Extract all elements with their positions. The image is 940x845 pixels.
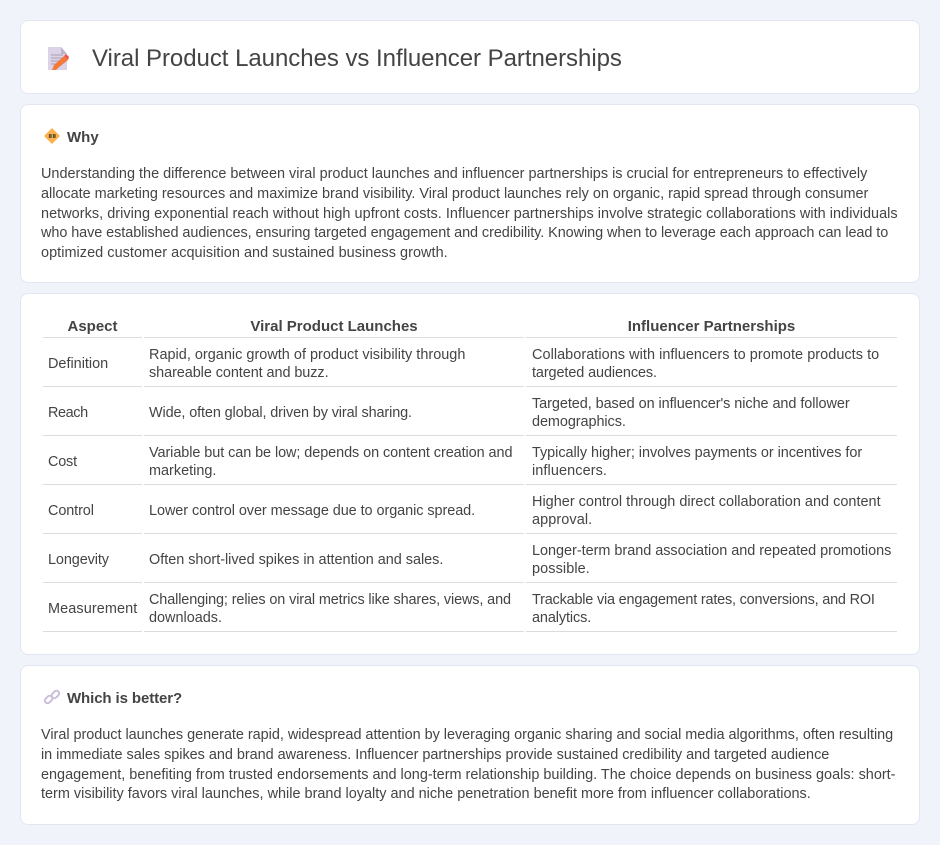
- row: control: Lower control over message due to organic spread.: [149, 503, 475, 519]
- table header row: [43, 318, 897, 338]
- text block: why paragraph: allocate marketing resources and maximize brand visibility. Viral product launches rely on organic, rapid spread through consumer: [41, 186, 868, 202]
- panel: comparison table: [20, 293, 920, 655]
- text block: why paragraph: [41, 166, 898, 261]
- row: control: Higher control through direct collaboration and content: [532, 494, 881, 510]
- row: measurement: analytics.: [532, 610, 591, 626]
- row: reach: Reach: [48, 405, 88, 421]
- text block: why paragraph: Understanding the difference between viral product launches and influencer partnerships is crucial for entrepreneurs to effectively: [41, 166, 867, 182]
- row: cost: Cost: [48, 454, 77, 470]
- row: cost: influencers.: [532, 463, 607, 479]
- row: reach: Wide, often global, driven by viral sharing.: [149, 405, 412, 421]
- row: measurement: downloads.: [149, 610, 222, 626]
- heading: which is better: Which is better?: [67, 690, 182, 707]
- row: cost: Typically higher; involves payments or incentives for: [532, 445, 862, 461]
- column header: viral product launches: Viral Product Launches: [250, 318, 418, 335]
- text block: why paragraph: who have established audiences, ensuring targeted engagement and credibility. Knowing when to leverage each approach can lead to: [41, 225, 888, 241]
- row: control: [43, 494, 897, 534]
- row: cost: [43, 445, 897, 485]
- row: cost: marketing.: [149, 463, 216, 479]
- text block: why paragraph: optimized customer acquisition and sustained business growth.: [41, 245, 448, 261]
- heading: why: Why: [67, 129, 99, 146]
- row: reach: Targeted, based on influencer's niche and follower: [532, 396, 850, 412]
- icon: link: [44, 690, 60, 704]
- row: definition: Rapid, organic growth of product visibility through: [149, 347, 465, 363]
- text block: why paragraph: networks, driving exponential reach without high upfront costs. Influencer partnerships involve strategic collaborations with individuals: [41, 206, 898, 222]
- text block: which is better paragraph: engagement, benefiting from trusted endorsements and long-term relationship building. The choice depends on business goals: short-: [41, 767, 895, 783]
- text block: which is better paragraph: term visibility favors viral launches, while brand loyalty and niche penetration benefit more from influencer collaborations.: [41, 786, 811, 802]
- row: longevity: Longer-term brand association and repeated promotions: [532, 543, 891, 559]
- row: longevity: possible.: [532, 561, 590, 577]
- row: definition: targeted audiences.: [532, 365, 657, 381]
- row: longevity: Often short-lived spikes in attention and sales.: [149, 552, 443, 568]
- row: control: Control: [48, 503, 94, 519]
- column header: aspect: Aspect: [67, 318, 118, 335]
- row: reach: [43, 396, 897, 436]
- row: measurement: Measurement: [48, 601, 137, 617]
- icon: warning diamond: [44, 128, 60, 144]
- row: definition: Definition: [48, 356, 108, 372]
- row: control: approval.: [532, 512, 592, 528]
- row: definition: [43, 347, 897, 387]
- row: measurement: [43, 592, 897, 632]
- text block: which is better paragraph: [41, 727, 895, 802]
- row: cost: Variable but can be low; depends on content creation and: [149, 445, 512, 461]
- row: definition: shareable content and buzz.: [149, 365, 329, 381]
- title: Viral Product Launches vs Influencer Partnerships: [92, 45, 622, 72]
- row: longevity: [43, 543, 897, 583]
- row: measurement: Challenging; relies on viral metrics like shares, views, and: [149, 592, 511, 608]
- text block: which is better paragraph: Viral product launches generate rapid, widespread attention by leveraging organic sharing and social media algorithms, often resulting: [41, 727, 893, 743]
- panel: why: [20, 104, 920, 283]
- panel: title header: [20, 20, 920, 94]
- text block: which is better paragraph: in immediate sales spikes and brand awareness. Influencer partnerships provide sustained credibility and targeted audience: [41, 747, 829, 763]
- column header: influencer partnerships: Influencer Partnerships: [628, 318, 795, 335]
- row: longevity: Longevity: [48, 552, 109, 568]
- row: reach: demographics.: [532, 414, 626, 430]
- row: measurement: Trackable via engagement rates, conversions, and ROI: [532, 592, 875, 608]
- row: definition: Collaborations with influencers to promote products to: [532, 347, 879, 363]
- icon: document with pencil: [48, 47, 69, 70]
- panel: which is better: [20, 665, 920, 825]
